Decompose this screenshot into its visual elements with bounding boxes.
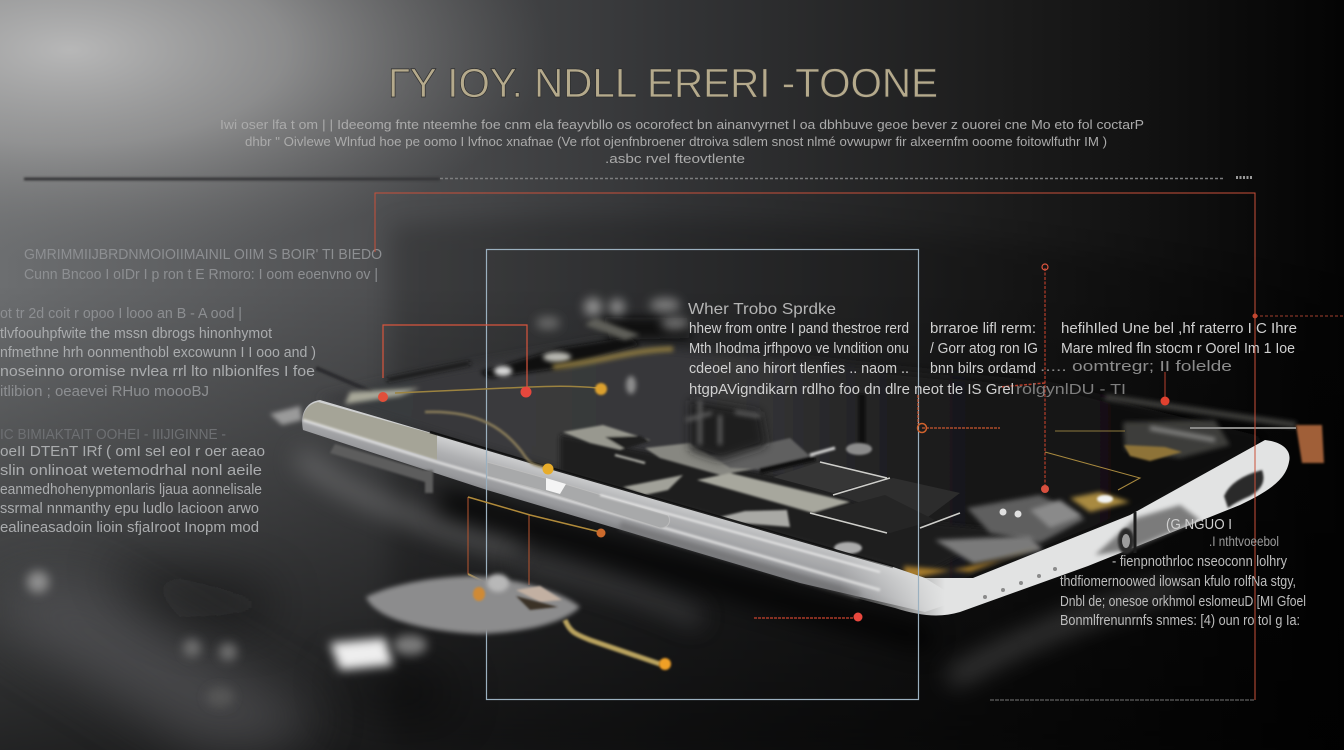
- gold wires: [395, 386, 1140, 585]
- left text block 2: noseinno oromise nvlea rrl lto nlbionlfes I foe: [0, 363, 315, 380]
- left text block 2: [0, 305, 316, 400]
- lower right callout: thdfiomernoowed ilowsan kfulo rolfNa stgy,: [1060, 574, 1296, 590]
- orange and red annotation lines: [375, 193, 1344, 700]
- right callout text: [1040, 320, 1297, 375]
- blurred foreground components: [0, 563, 446, 750]
- intro text: dhbr " Oivlewe Wlnfud hoe pe oomo I lvfnoc xnafnae (Ve rfot ojenfnbroener dtroiva sdlem snost nlmé ovwupwr fir alxeernfm ooome foitowlfuthr IM ): [245, 134, 1107, 149]
- phone: [270, 298, 1324, 615]
- left text block 3: ssrmal nnmanthy epu ludlo lacioon arwo: [0, 500, 259, 517]
- lower right callout: (G NGUO I: [1166, 516, 1232, 533]
- middle callout text: / Gorr atog ron IG: [930, 340, 1038, 357]
- bright right corner: [840, 440, 1290, 615]
- annotation dots: [378, 264, 1258, 670]
- phone screen: [318, 342, 1268, 595]
- center callout heading: Wher Trobo Sprdke: [688, 301, 836, 318]
- left text block 3: ealineasadoin lioin sfjaIroot Inopm mod: [0, 519, 259, 536]
- middle callout text: [930, 320, 1126, 398]
- intro text: Iwi oser lfa t om | | Ideeomg fnte nteemhe foe cnm ela feayvbllo os ocorofect bn ainanvyrnet l oa dbhbuve geoe bever z ouorei cne Mo eto fol coctarP: [220, 117, 1144, 132]
- table reflections: [300, 455, 1180, 680]
- center callout text: Mth Ihodma jrfhpovo ve lvndition onu: [689, 340, 909, 357]
- left text block 3: slin onlinoat wetemodrhal nonl aeile: [0, 462, 262, 479]
- center callout text: cdeoel ano hirort tlenfies .. naom ..: [689, 360, 909, 377]
- central transparent frame: [486, 250, 918, 700]
- left text block 3: [0, 426, 265, 536]
- left text block 2: nfmethne hrh oonmenthobl excowunn I I ooo and ): [0, 344, 316, 361]
- right callout text: hefihIled Une bel ,hf raterro I C Ihre: [1061, 320, 1297, 337]
- intro text: [220, 117, 1144, 166]
- center callout text: hhew from ontre I pand thestroe rerd: [689, 320, 909, 337]
- left text block 2: tlvfoouhpfwite the mssn dbrogs hinonhymot: [0, 325, 273, 342]
- left text block 3: oeII DTEnT IRf ( omI seI eoI r oer aeao: [0, 443, 265, 460]
- left text block 1: GMRIMMIIJBRDNMOIOIIMAINIL OIIM S BOIR' TI BIEDO: [24, 246, 382, 263]
- speaker grille: [983, 567, 1057, 599]
- chips: [563, 394, 1324, 580]
- far end blurred parts: [480, 298, 690, 394]
- left rim and connector: [270, 406, 302, 425]
- left text block 2: ot tr 2d coit r opoo I looo an B - A ood |: [0, 305, 242, 322]
- lower right callout: .I nthtvoeebol: [1209, 533, 1279, 549]
- lower right callout: [1060, 516, 1306, 629]
- board: [560, 435, 1010, 578]
- left text block 2: itlibion ; oeaevei RHuo moooBJ: [0, 383, 209, 400]
- right callout text: ..... oomtregr; II folelde: [1040, 358, 1232, 375]
- silver side band: [302, 400, 960, 612]
- center callout text: htgpAVigndikarn rdlho foo dn dlre neot tle IS Grel: [689, 381, 1014, 398]
- lower right callout: Bonmlfrenunrnfs snmes: [4) oun ro toI g Ia:: [1060, 613, 1300, 629]
- divider line: [24, 178, 1252, 179]
- intro text: .asbc rvel fteovtlente: [605, 151, 745, 166]
- title: ГY IOY. NDLL ERERI ‑TOONE: [388, 60, 938, 106]
- center callout text: [689, 320, 1014, 398]
- lower round component: [330, 574, 660, 670]
- lower right callout: - fienpnothrloc nseoconn lolhry: [1112, 554, 1288, 570]
- left text block 1: Cunn Bncoo I oIDr I p ron t E Rmoro: I oom eoenvno ov |: [24, 266, 378, 283]
- left text block 3: IC BIMIAKTAIT OOHEI - IIIJIGINNE -: [0, 426, 226, 443]
- right callout text: Mare mlred fln stocm r Oorel Im 1 Ioe: [1061, 340, 1295, 357]
- left text block 1: [24, 246, 382, 283]
- middle callout text: rolgynlDU - TI: [1016, 381, 1126, 398]
- middle callout text: bnn bilrs ordamd: [930, 360, 1036, 377]
- side port: [1095, 470, 1264, 555]
- left text block 3: eanmedhohenypmonlaris ljaua aonnelisale: [0, 481, 262, 498]
- middle callout text: brraroe lifl rerm:: [930, 320, 1036, 337]
